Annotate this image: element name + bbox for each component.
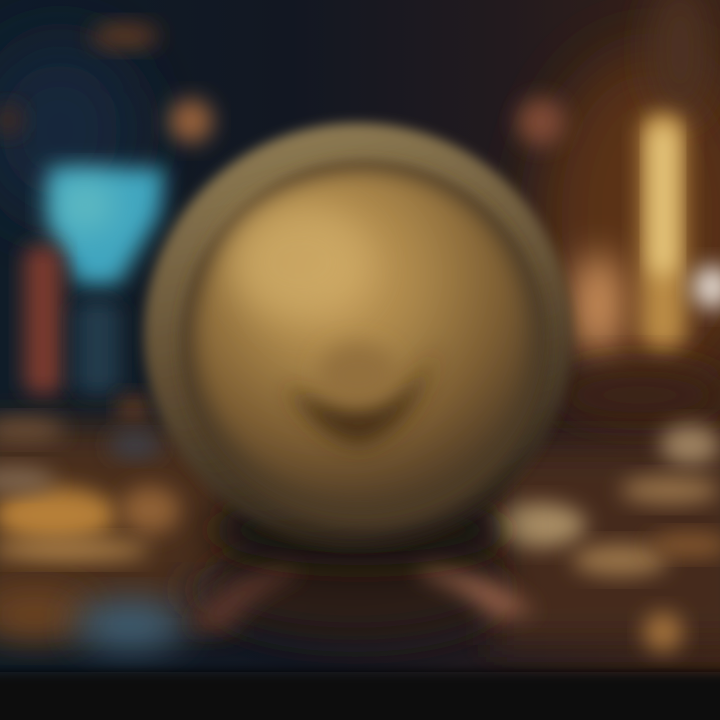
- gold piles left: [0, 418, 240, 640]
- coin groove: [180, 161, 548, 529]
- golden pillar of light: [640, 112, 686, 352]
- coin: [144, 123, 572, 565]
- gold piles right: [490, 425, 720, 652]
- coin rim: [144, 123, 572, 547]
- blue glowing panel: [48, 168, 165, 285]
- warm glow beside coin: [550, 253, 720, 425]
- dark bottom band: [0, 672, 720, 720]
- background lights: blurred orbs: [0, 23, 565, 146]
- coin highlight: [230, 204, 370, 320]
- coin emblem: [285, 335, 440, 445]
- coin face: [194, 169, 530, 501]
- table reflections under coin: [75, 540, 535, 649]
- coin shadow: [210, 495, 510, 565]
- red and blue figures at left: [24, 245, 148, 425]
